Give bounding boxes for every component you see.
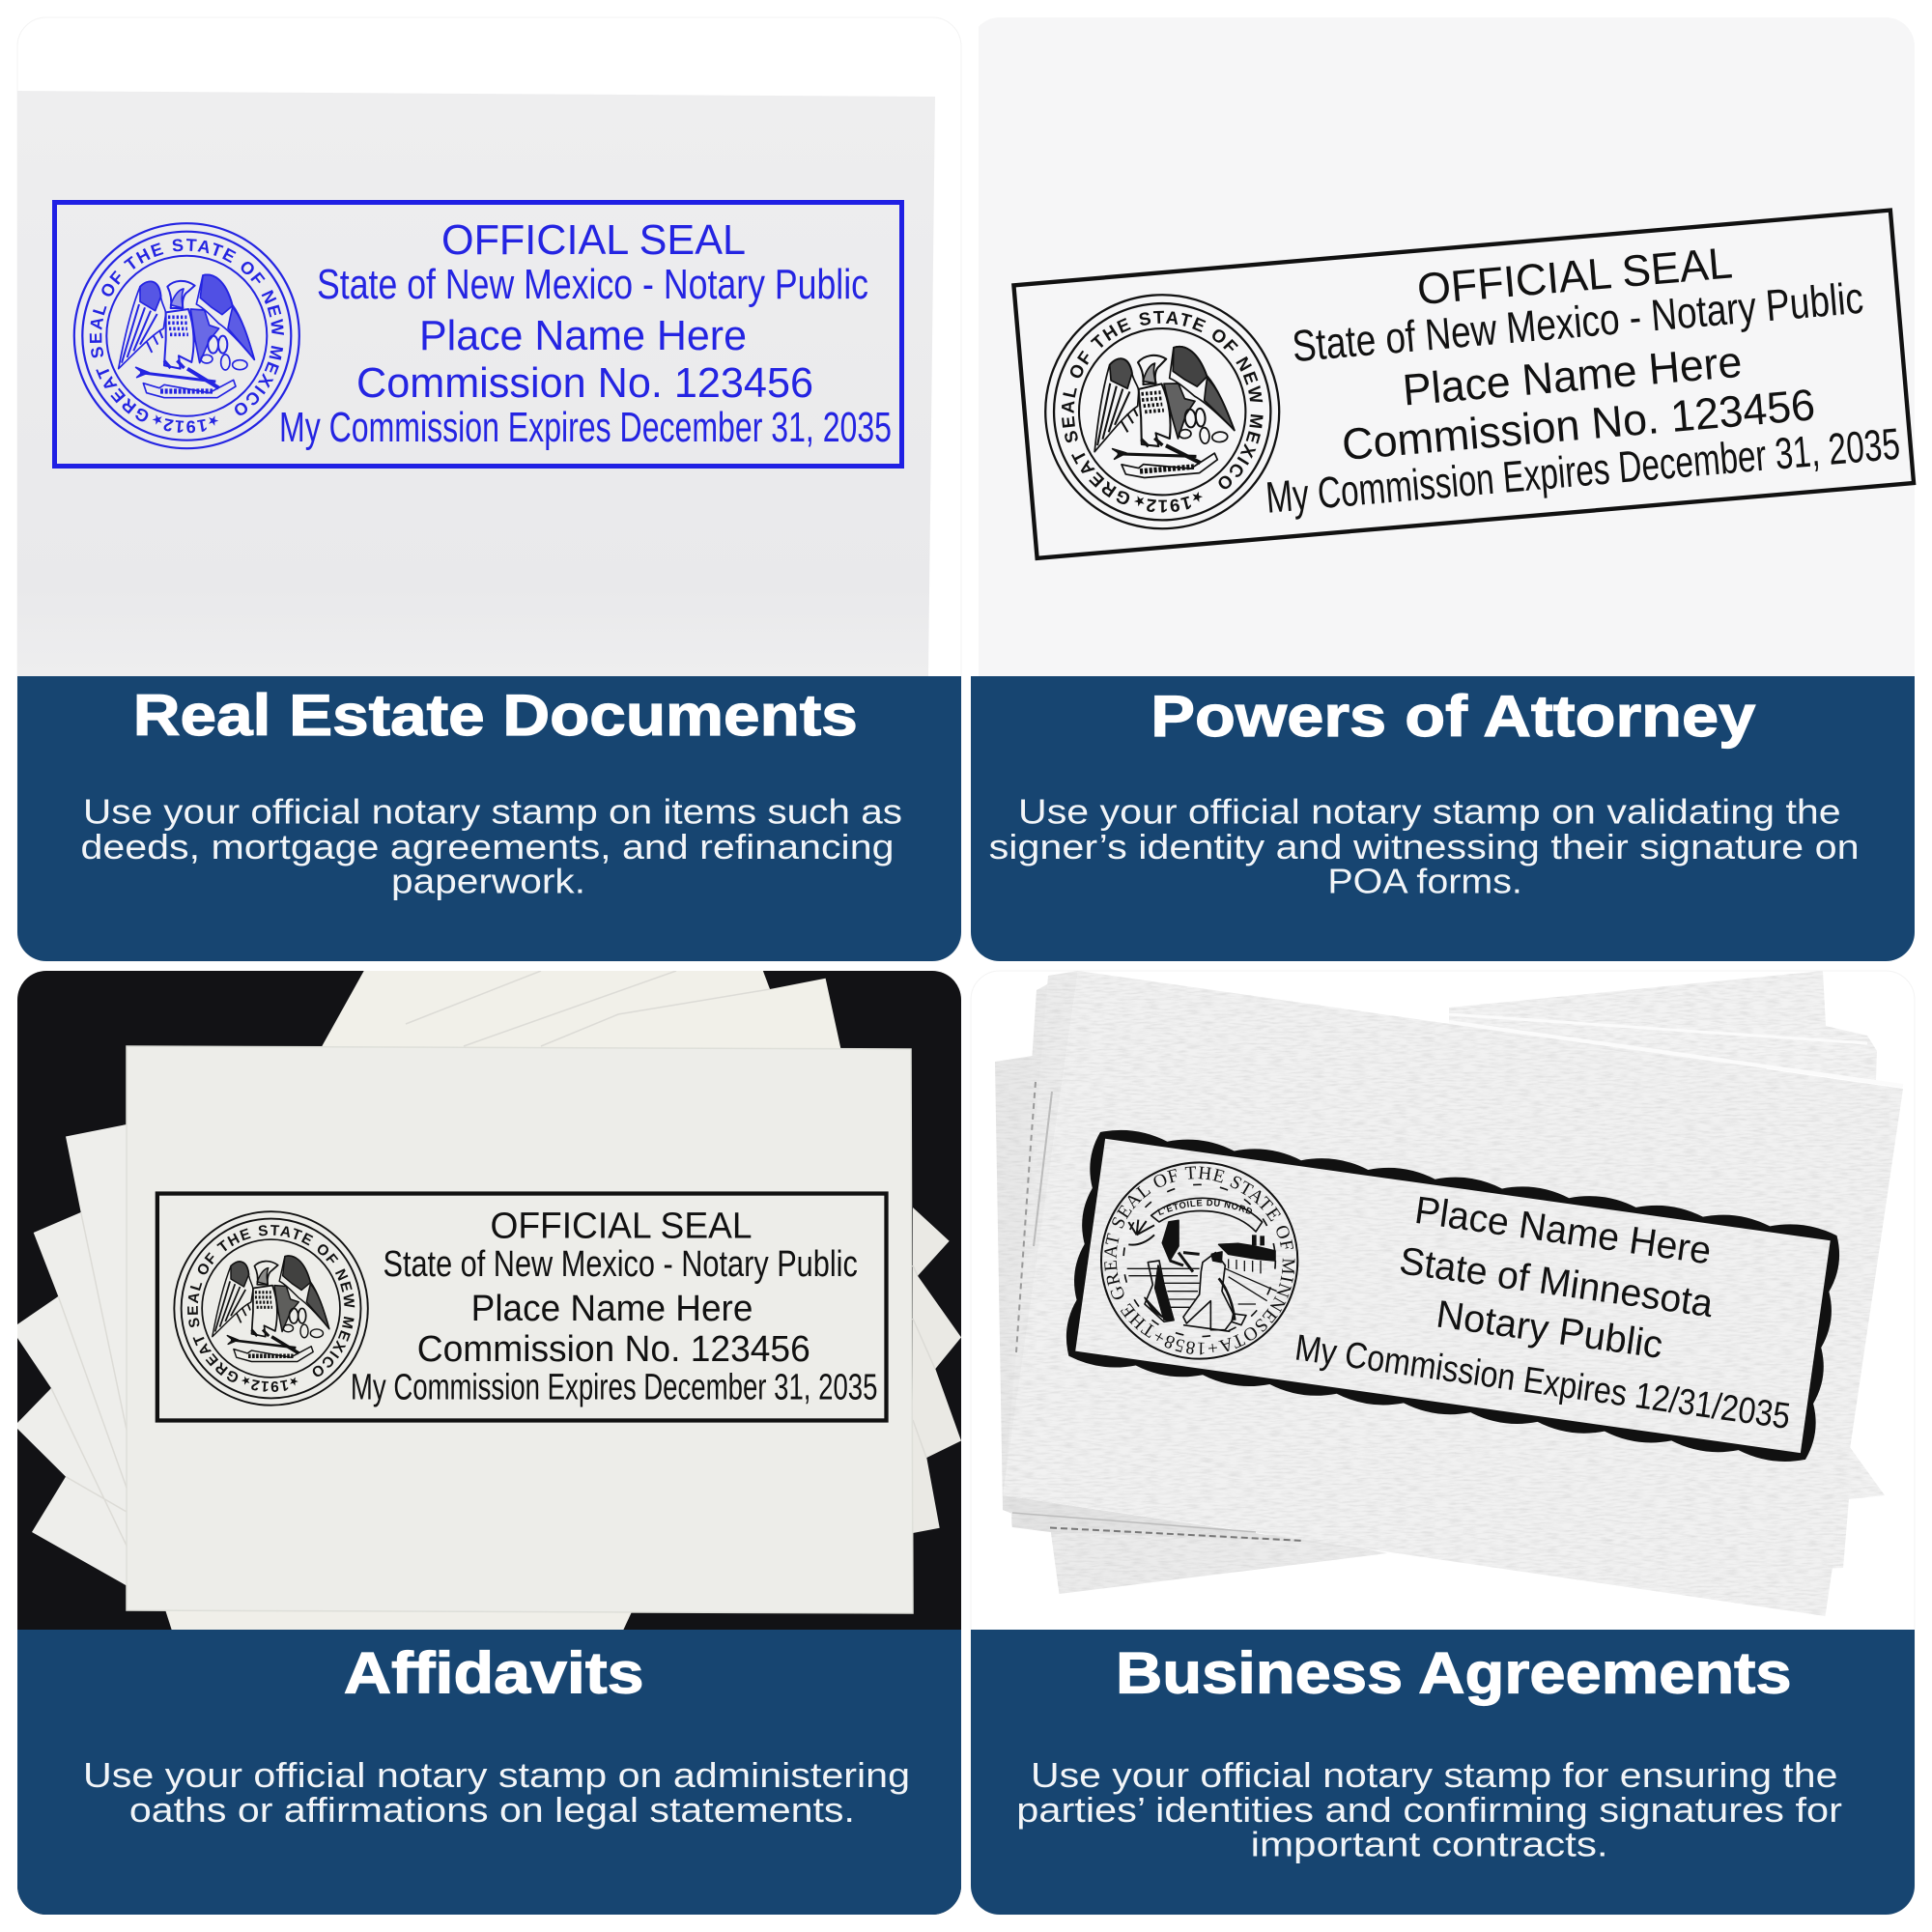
stamp text: State of Minnesota <box>1397 1239 1717 1325</box>
stamp text: Place Name Here <box>1401 337 1744 415</box>
description: Use your official notary stamp on items such as <box>83 792 902 832</box>
description: POA forms. <box>1327 862 1522 901</box>
description: Use your official notary stamp for ensuring the <box>1031 1755 1837 1795</box>
description: Use your official notary stamp on validating the <box>1018 792 1841 832</box>
stamp text: Commission No. 123456 <box>356 359 813 407</box>
state seal of Minnesota: L'ETOILE DU NORD <box>1157 1200 1252 1215</box>
stamp text: Place Name Here <box>1412 1189 1714 1272</box>
blue notary stamp <box>52 200 904 469</box>
heading: Powers of Attorney <box>1151 684 1756 749</box>
panel: powers of attorney <box>971 17 1917 961</box>
black scalloped notary stamp <box>1063 1125 1843 1466</box>
stamp text <box>279 216 892 451</box>
description: deeds, mortgage agreements, and refinancing <box>81 827 895 867</box>
black notary stamp, tilted <box>1011 208 1917 560</box>
state seal: ★1912★ <box>153 414 218 433</box>
description: signer’s identity and witnessing their signature on <box>989 827 1860 867</box>
caption band <box>17 1630 961 1915</box>
description <box>81 792 902 901</box>
stamp text: Place Name Here <box>471 1289 753 1329</box>
stamp text: State of New Mexico - Notary Public <box>317 261 868 308</box>
panel: affidavits <box>17 971 961 1915</box>
stamp text: Place Name Here <box>419 312 747 359</box>
state seal: GREAT SEAL OF THE STATE OF NEW MEXICO <box>1062 311 1264 504</box>
stamp text: OFFICIAL SEAL <box>490 1207 753 1247</box>
photo: light paper sheet <box>979 17 1915 684</box>
panel: business agreements <box>970 970 1915 1915</box>
photo: grey paper sheet <box>17 91 935 676</box>
state seal: ★1912★ <box>242 1376 298 1392</box>
caption band <box>17 676 961 961</box>
stamp text: State of New Mexico - Notary Public <box>383 1244 858 1285</box>
description <box>1016 1755 1842 1864</box>
heading: Affidavits <box>344 1641 643 1706</box>
stamp text: OFFICIAL SEAL <box>441 216 746 264</box>
stamp text: Notary Public <box>1434 1293 1665 1367</box>
black notary stamp <box>155 1191 889 1423</box>
caption band <box>971 676 1915 961</box>
heading: Real Estate Documents <box>133 683 858 748</box>
caption band <box>971 1630 1915 1915</box>
stamp text <box>351 1207 877 1408</box>
state seal: GREAT SEAL OF THE STATE OF NEW MEXICO <box>187 1225 355 1382</box>
stamp text: My Commission Expires 12/31/2035 <box>1293 1327 1793 1437</box>
panel: real estate documents <box>17 17 962 962</box>
state seal: GREAT SEAL OF THE STATE OF NEW MEXICO <box>89 239 284 421</box>
stamp text <box>1293 1176 1814 1437</box>
stamp text: My Commission Expires December 31, 2035 <box>351 1368 877 1408</box>
scalloped frame <box>1063 1125 1843 1466</box>
state seal of Minnesota: THE GREAT SEAL OF THE STATE OF MINNESOTA+1858+ <box>1104 1166 1294 1354</box>
stamp text: Commission No. 123456 <box>1340 380 1817 469</box>
heading: Business Agreements <box>1116 1641 1792 1706</box>
description: Use your official notary stamp on administering <box>83 1755 910 1795</box>
description <box>83 1755 910 1830</box>
photo: fanned white cards <box>17 966 961 1633</box>
description: important contracts. <box>1251 1825 1608 1864</box>
stamp text <box>1247 225 1902 523</box>
description: parties’ identities and confirming signatures for <box>1016 1790 1842 1830</box>
stamp text: Commission No. 123456 <box>417 1329 810 1370</box>
stamp text: OFFICIAL SEAL <box>1415 238 1734 314</box>
stamp text: My Commission Expires December 31, 2035 <box>279 404 892 451</box>
photo: textured paper stack <box>995 971 1903 1616</box>
stamp frame <box>157 1194 887 1420</box>
description: paperwork. <box>391 862 585 901</box>
stamp frame <box>1013 211 1914 558</box>
description <box>989 792 1860 901</box>
description: oaths or affirmations on legal statements. <box>129 1790 855 1830</box>
stamp frame <box>54 203 902 466</box>
state seal: ★1912★ <box>1134 492 1203 512</box>
